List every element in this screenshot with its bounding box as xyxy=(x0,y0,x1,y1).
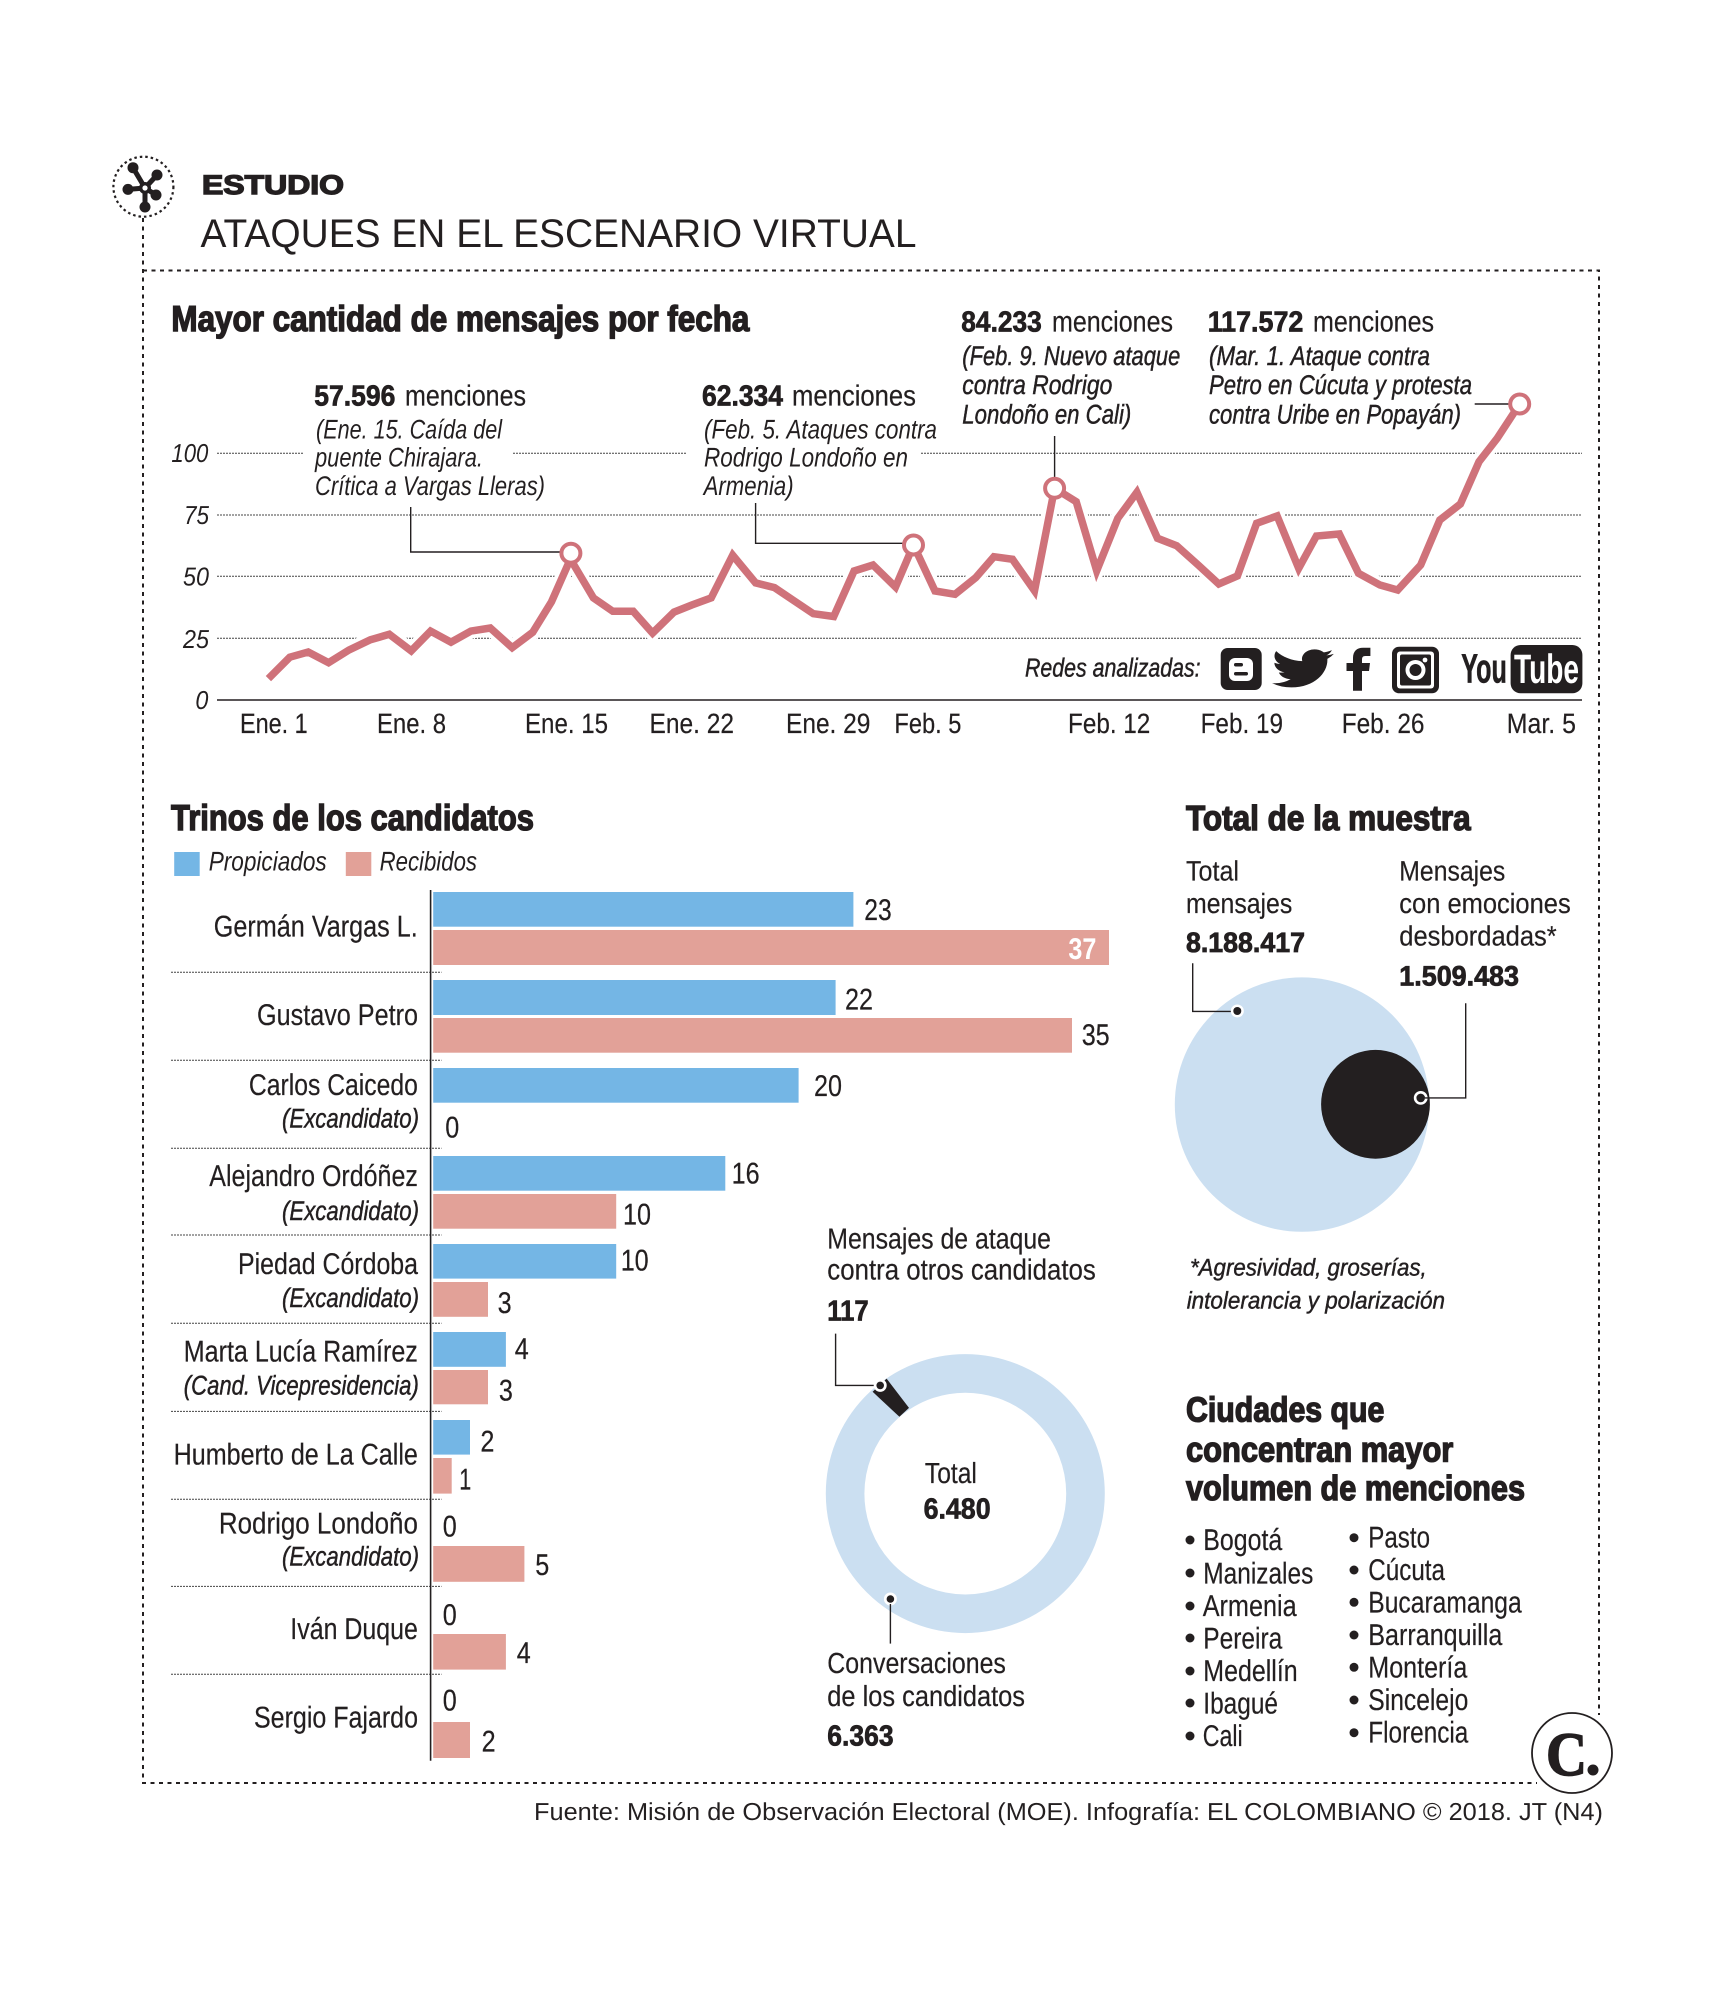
heading: cities xyxy=(1186,1391,1525,1508)
icon: instagram xyxy=(1392,647,1439,693)
icon: twitter xyxy=(1272,649,1334,687)
x axis labels: Ene. 1 xyxy=(240,708,308,739)
x axis labels: Mar. 5 xyxy=(1507,708,1576,739)
callout: Mar 1: menciones xyxy=(1313,307,1434,339)
candidate names: Humberto de La Calle xyxy=(174,1438,418,1471)
panel: line chart of messages by date xyxy=(171,298,1582,739)
x axis labels: Feb. 26 xyxy=(1342,708,1424,739)
panel: cities xyxy=(1186,1391,1525,1753)
candidate names: Germán Vargas L. xyxy=(214,911,418,944)
bars: recibidos xyxy=(433,930,1109,1758)
bar values: 3 xyxy=(498,1287,512,1320)
axis xyxy=(430,890,432,1761)
panel: total sample xyxy=(1175,799,1571,1315)
list: cities column 1: Medellín xyxy=(1203,1655,1298,1688)
list: cities column 1: Ibagué xyxy=(1203,1687,1278,1720)
label: networks analyzed: Redes analizadas: xyxy=(1025,653,1201,683)
callout: Feb 9: contra Rodrigo xyxy=(962,370,1112,400)
logo: El Colombiano xyxy=(1532,1713,1612,1793)
candidate names: (Excandidato) xyxy=(282,1283,419,1313)
text: overflowing emotions: Mensajes xyxy=(1399,856,1505,887)
candidate names: Iván Duque xyxy=(290,1613,418,1646)
callout: Feb 5: Rodrigo Londoño en xyxy=(704,443,908,473)
callout: Mar 1: contra Uribe en Popayán) xyxy=(1209,399,1461,429)
candidate names: (Excandidato) xyxy=(282,1542,419,1572)
callout: Feb 9: (Feb. 9. Nuevo ataque xyxy=(962,341,1180,371)
heading: total sample: Total de la muestra xyxy=(1186,799,1471,838)
legend: Recibidos xyxy=(380,847,477,877)
text: donut total: Total xyxy=(925,1458,977,1490)
text: attack messages: 117 xyxy=(827,1295,869,1327)
leader lines for callouts xyxy=(411,404,1509,552)
y axis labels: 50 xyxy=(183,562,209,592)
bar values: 35 xyxy=(1082,1019,1110,1052)
callout: Jan 15: (Ene. 15. Caída del xyxy=(316,414,503,444)
callout: Feb 9: menciones xyxy=(1052,307,1173,339)
bar values: 0 xyxy=(443,1599,457,1632)
text: attack messages: Mensajes de ataque xyxy=(827,1223,1051,1255)
candidate names: Sergio Fajardo xyxy=(254,1702,418,1734)
y axis labels: 25 xyxy=(182,624,209,654)
text: total messages: 8.188.417 xyxy=(1186,927,1305,958)
candidate names: Carlos Caicedo xyxy=(249,1069,418,1102)
callout: Jan 15: puente Chirajara. xyxy=(314,443,483,473)
bar values: 3 xyxy=(499,1375,513,1408)
text: conversations: Conversaciones xyxy=(827,1648,1006,1680)
leader: conversations xyxy=(884,1592,897,1644)
row separators xyxy=(171,972,442,1674)
callout: Mar 1: Petro en Cúcuta y protesta xyxy=(1209,370,1472,400)
bar values: 4 xyxy=(517,1637,531,1670)
bar values: 0 xyxy=(443,1510,457,1543)
candidate names: Alejandro Ordóñez xyxy=(209,1160,418,1193)
panel: candidate tweets bar chart xyxy=(171,797,1110,1761)
markers: peak points xyxy=(561,394,1529,563)
heading: cities: concentran mayor xyxy=(1186,1431,1454,1470)
text: attack messages: contra otros candidatos xyxy=(827,1254,1096,1286)
list: cities column 2: Sincelejo xyxy=(1368,1684,1468,1717)
text: donut total xyxy=(924,1458,991,1526)
bar values: 1 xyxy=(459,1463,471,1496)
list: cities column 1: Bogotá xyxy=(1203,1524,1283,1557)
bar values: 2 xyxy=(482,1725,496,1758)
y axis labels: 100 xyxy=(171,438,209,468)
icon: youtube: You xyxy=(1461,646,1507,692)
x axis labels: Feb. 19 xyxy=(1201,708,1283,739)
x axis labels: Ene. 22 xyxy=(650,708,734,739)
text: overflowing emotions: desbordadas* xyxy=(1399,920,1557,951)
callout: Feb 5: (Feb. 5. Ataques contra xyxy=(704,414,937,444)
candidate names: (Cand. Vicepresidencia) xyxy=(184,1370,419,1400)
bar values: 4 xyxy=(515,1333,529,1366)
list: cities column 1 xyxy=(1186,1524,1313,1753)
icon: facebook xyxy=(1346,648,1370,691)
logo: El Colombiano: C xyxy=(1546,1721,1587,1789)
text: conversations: de los candidatos xyxy=(827,1681,1025,1713)
candidate names: Rodrigo Londoño xyxy=(219,1508,418,1541)
bar values: 16 xyxy=(732,1157,760,1190)
callout: Jan 15 xyxy=(314,381,545,501)
panel: donut chart of attack messages xyxy=(827,1223,1096,1752)
y axis labels: 0 xyxy=(195,685,209,715)
proportional circles xyxy=(1175,977,1430,1232)
candidate names: (Excandidato) xyxy=(282,1196,419,1226)
text: conversations xyxy=(827,1648,1025,1752)
leader: overflowing emotions xyxy=(1415,1003,1466,1104)
callout: Jan 15: 57.596 xyxy=(314,381,395,413)
text: total messages: Total xyxy=(1186,856,1239,887)
text: overflowing emotions: con emociones xyxy=(1399,888,1571,919)
list: cities column 2: Cúcuta xyxy=(1368,1554,1445,1587)
bar values: 23 xyxy=(864,894,892,927)
callout: Mar 1: 117.572 xyxy=(1208,307,1303,339)
text: overflowing emotions xyxy=(1399,856,1571,991)
icon: youtube: Tube xyxy=(1514,646,1579,692)
icon: network node xyxy=(113,157,173,217)
x axis labels: Ene. 15 xyxy=(525,708,608,739)
bar values: 37 xyxy=(1068,933,1096,966)
callout: Feb 9 xyxy=(961,307,1180,429)
list: cities column 2 xyxy=(1350,1522,1522,1750)
bar values: 2 xyxy=(480,1425,494,1458)
bar values: 22 xyxy=(845,983,873,1016)
list: cities column 1: Manizales xyxy=(1203,1557,1313,1590)
callout: Feb 5: Armenia) xyxy=(702,471,794,501)
icon: blogger xyxy=(1221,648,1262,690)
bar values: 10 xyxy=(623,1198,651,1231)
x axis labels: Ene. 29 xyxy=(786,708,870,739)
bar values: 10 xyxy=(621,1244,649,1277)
callout: Feb 9: Londoño en Cali) xyxy=(962,399,1131,429)
source line: Fuente: Misión de Observación Electoral (MOE). Infografía: EL COLOMBIANO © 2018. JT (N4) xyxy=(534,1799,1603,1826)
list: cities column 1: Armenia xyxy=(1203,1590,1297,1623)
heading: cities: volumen de menciones xyxy=(1186,1469,1525,1508)
text: total messages xyxy=(1186,856,1305,958)
bar values xyxy=(443,894,1110,1758)
footnote xyxy=(1187,1255,1445,1315)
text: conversations: 6.363 xyxy=(827,1720,894,1752)
leader: attack messages xyxy=(836,1334,887,1392)
bar values: 20 xyxy=(814,1070,842,1103)
line series: mentions over time xyxy=(268,404,1520,679)
candidate names xyxy=(174,911,419,1734)
frame: dashed border xyxy=(143,218,1599,1783)
heading: cities: Ciudades que xyxy=(1186,1391,1384,1430)
list: cities column 2: Pasto xyxy=(1368,1522,1430,1555)
bars: propiciados xyxy=(433,892,853,1455)
callout: Mar 1: (Mar. 1. Ataque contra xyxy=(1209,341,1430,371)
heading: bar chart: Trinos de los candidatos xyxy=(171,797,534,838)
y axis labels: 75 xyxy=(184,500,209,530)
x axis labels: Feb. 5 xyxy=(894,708,961,739)
legend: Propiciados xyxy=(209,847,327,877)
callout: Feb 9: 84.233 xyxy=(961,307,1042,339)
candidate names: (Excandidato) xyxy=(282,1103,419,1133)
bar values: 0 xyxy=(445,1112,459,1145)
list: cities column 2: Montería xyxy=(1368,1651,1468,1684)
callout: Jan 15: Crítica a Vargas Lleras) xyxy=(315,471,545,501)
section label: Estudio: ESTUDIO xyxy=(202,170,344,200)
title: ATAQUES EN EL ESCENARIO VIRTUAL xyxy=(200,212,916,256)
list: cities column 1: Pereira xyxy=(1203,1622,1283,1655)
list: cities column 2: Bucaramanga xyxy=(1368,1586,1522,1619)
text: total messages: mensajes xyxy=(1186,888,1292,919)
callout: Feb 5: menciones xyxy=(792,381,916,413)
bar values: 0 xyxy=(443,1685,457,1718)
icon: youtube xyxy=(1461,645,1582,693)
bar values: 5 xyxy=(535,1549,549,1582)
text: donut total: 6.480 xyxy=(924,1494,991,1526)
candidate names: Marta Lucía Ramírez xyxy=(184,1335,418,1368)
footnote: *Agresividad, groserías, xyxy=(1190,1255,1427,1282)
callout: Feb 5: 62.334 xyxy=(702,381,783,413)
text: overflowing emotions: 1.509.483 xyxy=(1399,960,1519,991)
leader: total messages xyxy=(1193,963,1244,1018)
heading: line chart: Mayor cantidad de mensajes por fecha xyxy=(171,298,750,339)
candidate names: Piedad Córdoba xyxy=(238,1248,418,1281)
list: cities column 1: Cali xyxy=(1203,1720,1243,1753)
callout: Jan 15: menciones xyxy=(405,381,526,413)
donut segment: attack messages xyxy=(873,1379,909,1417)
candidate names: Gustavo Petro xyxy=(257,999,418,1032)
list: cities column 2: Florencia xyxy=(1368,1717,1469,1750)
footnote: intolerancia y polarización xyxy=(1187,1288,1445,1315)
x axis labels: Feb. 12 xyxy=(1068,708,1150,739)
list: cities column 2: Barranquilla xyxy=(1368,1619,1503,1652)
text: attack messages xyxy=(827,1223,1096,1327)
callout: Mar 1 xyxy=(1208,307,1472,429)
y axis labels xyxy=(171,438,209,715)
donut ring xyxy=(845,1373,1086,1614)
x axis labels: Ene. 8 xyxy=(377,708,446,739)
legend xyxy=(174,847,477,877)
callout: Feb 5 xyxy=(702,381,937,501)
x axis labels xyxy=(240,708,1576,739)
